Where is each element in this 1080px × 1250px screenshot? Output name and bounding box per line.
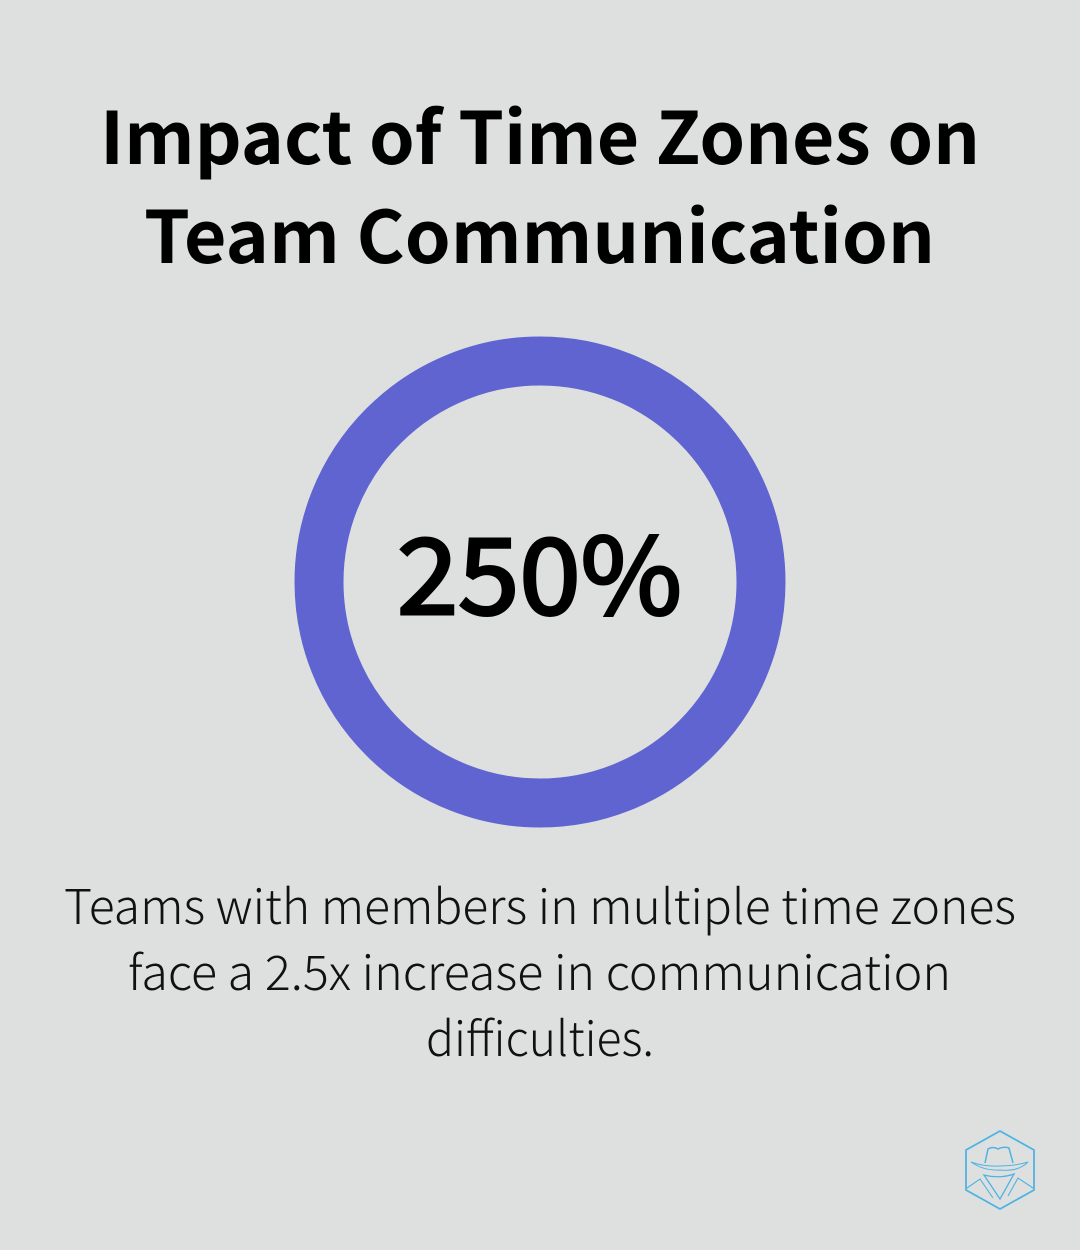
title: Impact of Time Zones on [100, 80, 980, 185]
title: Team Communication [144, 179, 935, 284]
description text [64, 868, 1016, 1070]
description text: face a 2.5x increase in communication [128, 934, 951, 1004]
icon: logo hexagon with hat [966, 1131, 1034, 1209]
description text: Teams with members in multiple time zones [64, 868, 1016, 938]
description text: difficulties. [426, 1000, 654, 1070]
ring chart [319, 361, 761, 803]
big number: 250% [397, 493, 682, 645]
title [100, 80, 980, 284]
